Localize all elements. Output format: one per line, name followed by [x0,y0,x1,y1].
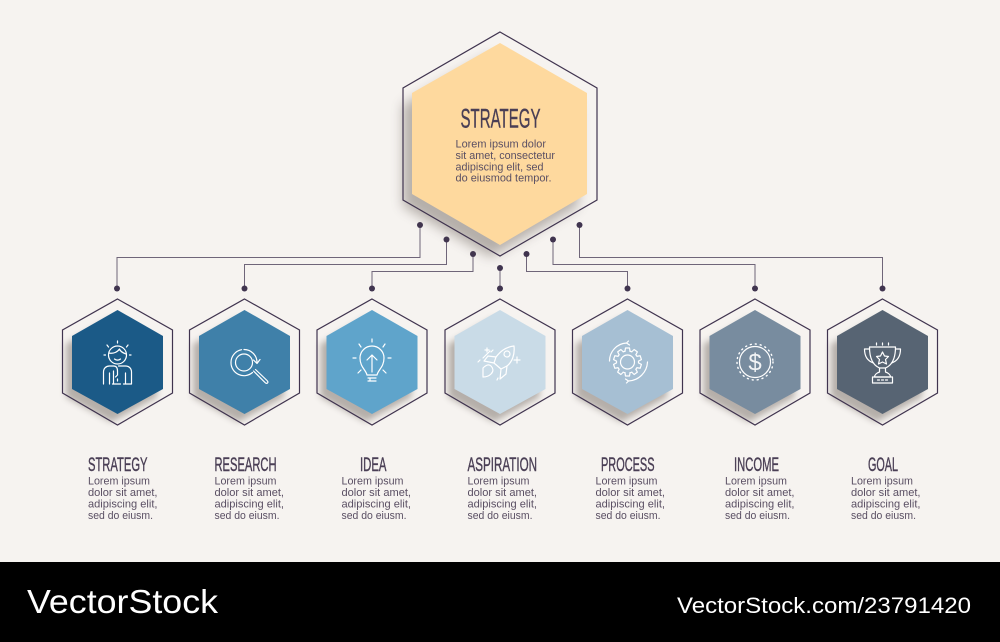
text block: process: PROCESS [601,454,654,476]
text block: strategy: dolor sit amet, [88,487,158,499]
main description: adipiscing elit, sed [456,161,544,173]
main description: Lorem ipsum dolor [456,138,546,150]
icon: rocket [478,346,520,380]
text block: income: sed do eiusm. [725,510,790,522]
hexagon: strategy [62,299,172,425]
icon: trophy [864,343,900,383]
hexagon: goal [828,299,938,425]
text block: strategy: STRATEGY [88,454,148,476]
text block: income: adipiscing elit, [725,498,795,510]
text block: idea: IDEA [360,454,386,476]
text block: aspiration: dolor sit amet, [468,487,537,499]
main heading: STRATEGY [460,104,540,134]
text block: strategy: sed do eiusm. [88,510,153,522]
text block: income: Lorem ipsum [725,476,787,488]
text block: process: Lorem ipsum [596,476,658,488]
panel: main strategy hexagon [403,32,597,257]
icon: light bulb [353,339,391,381]
text block: idea: dolor sit amet, [342,487,411,499]
text block: research: sed do eiusm. [214,510,280,522]
text block: aspiration [468,454,537,522]
footer logo: VectorStock [27,584,218,621]
text block: research: RESEARCH [214,454,276,476]
hexagon: idea [317,299,427,425]
text block: process: sed do eiusm. [596,510,660,522]
text block: goal: dolor sit amet, [851,487,921,499]
main description: sit amet, consectetur [456,150,555,162]
footer url: VectorStock.com/23791420 [677,593,971,618]
icon: gear [610,341,648,383]
text block: research: Lorem ipsum [214,476,277,488]
text block: goal: sed do eiusm. [851,510,916,522]
text block: income: INCOME [734,454,779,476]
text block: process: adipiscing elit, [596,498,665,510]
text block: strategy: Lorem ipsum [88,476,150,488]
text block: idea [342,454,411,522]
icon: magnifier [231,350,268,383]
text block: goal: adipiscing elit, [851,498,921,510]
text block: goal [851,454,921,522]
main description [456,138,555,185]
hexagon: income [700,299,810,425]
text block: aspiration: sed do eiusm. [468,510,532,522]
text block: idea: Lorem ipsum [342,476,404,488]
text block: goal: GOAL [868,454,898,476]
text block: income: dolor sit amet, [725,487,795,499]
main description: do eiusmod tempor. [456,173,552,185]
text block: strategy [88,454,158,522]
icon: person [104,341,132,384]
text block: research [214,454,284,522]
text block: process: dolor sit amet, [596,487,665,499]
icon: dollar coin: $ [748,350,762,376]
text block: aspiration: adipiscing elit, [468,498,537,510]
text block: idea: adipiscing elit, [342,498,411,510]
text block: income [725,454,795,522]
text block: aspiration: ASPIRATION [468,454,537,476]
connector lines [114,222,886,292]
hexagon: aspiration [445,299,555,425]
text block: strategy: adipiscing elit, [88,498,158,510]
text block: process [596,454,665,522]
hexagon: process [572,299,682,425]
text block: research: adipiscing elit, [214,498,284,510]
text block: idea: sed do eiusm. [342,510,406,522]
hexagon: research [190,299,300,425]
footer bar [0,562,1000,642]
text block: research: dolor sit amet, [214,487,284,499]
text block: aspiration: Lorem ipsum [468,476,530,488]
text block: goal: Lorem ipsum [851,476,913,488]
